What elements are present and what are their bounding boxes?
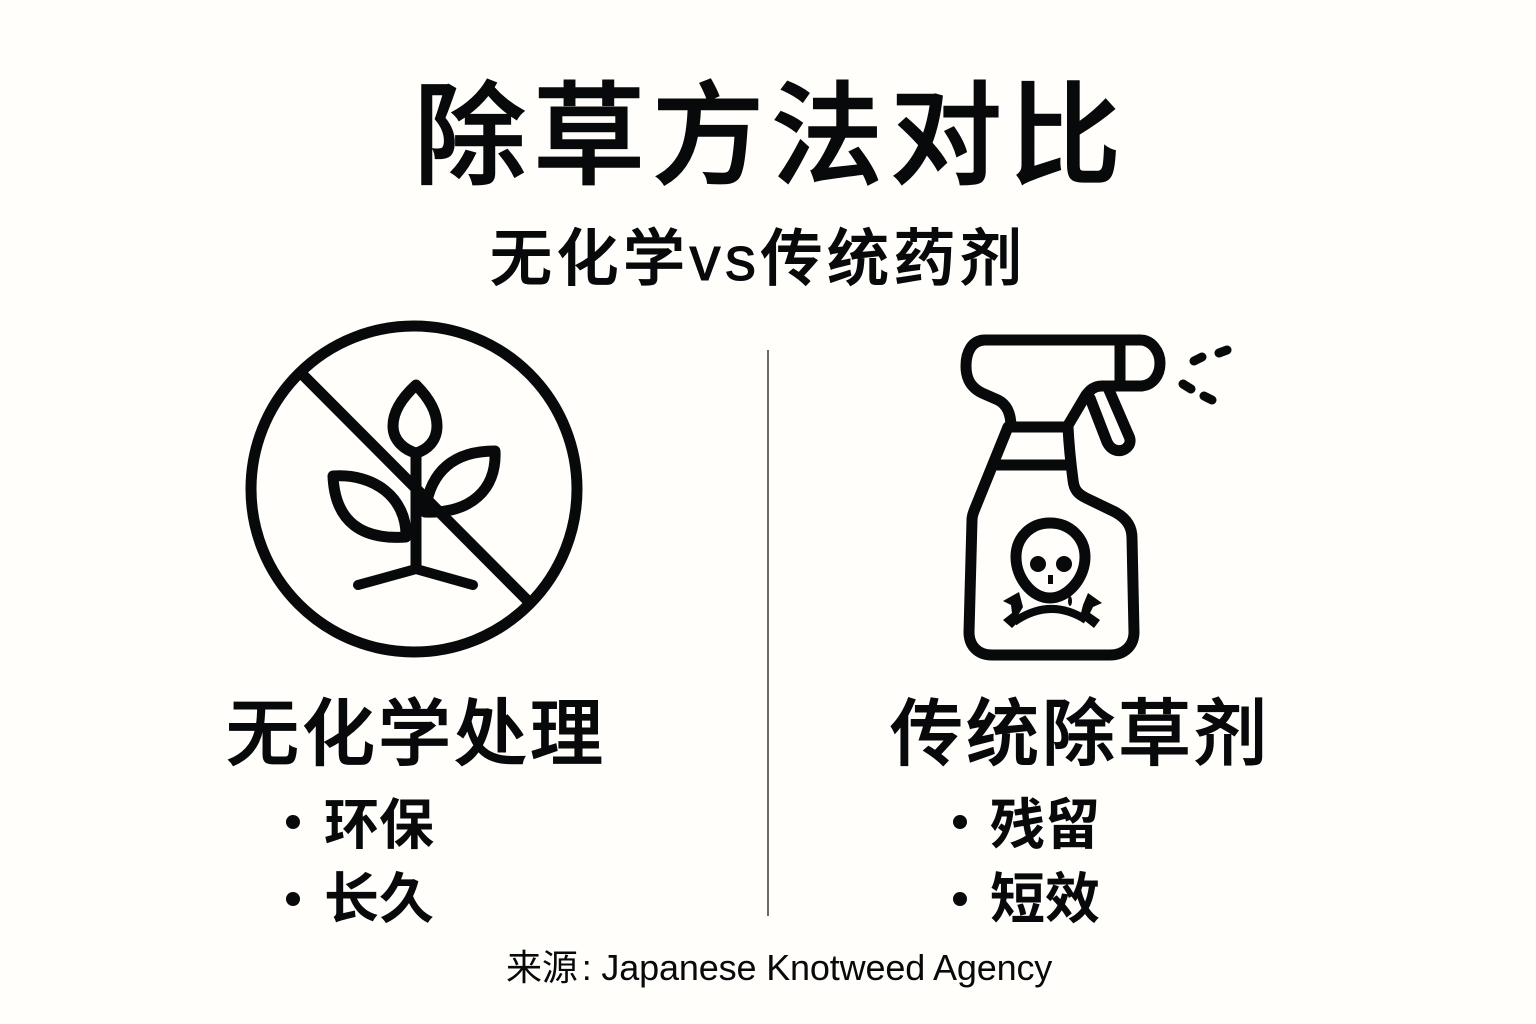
trigger: [1090, 390, 1130, 451]
right heading: 传统除草剂: [890, 694, 1270, 775]
bullet: [286, 815, 300, 829]
prohibition slash: [303, 375, 527, 600]
crossbones: [1003, 592, 1102, 628]
title: 除草方法对比: [414, 74, 1128, 199]
subtitle: 无化学vs传统药剂: [490, 225, 1027, 294]
item: long lasting: 长久: [324, 868, 434, 930]
source: 来源: Japanese Knotweed Agency: [506, 947, 1052, 988]
bullet: [953, 815, 967, 829]
plant: [333, 385, 495, 585]
divider: [767, 350, 769, 916]
left list: [286, 794, 434, 930]
item: eco-friendly: 环保: [324, 794, 434, 856]
prohibition circle: [251, 326, 577, 652]
item: residue: 残留: [990, 794, 1100, 856]
spray droplets: [1183, 350, 1227, 400]
bullet: [286, 892, 300, 906]
bottle body: [969, 427, 1134, 655]
bullet: [953, 892, 967, 906]
item: short-acting: 短效: [990, 868, 1100, 930]
right list: [953, 794, 1100, 930]
spray head: [966, 340, 1160, 427]
skull: [1016, 523, 1085, 606]
left heading: 无化学处理: [226, 694, 606, 775]
